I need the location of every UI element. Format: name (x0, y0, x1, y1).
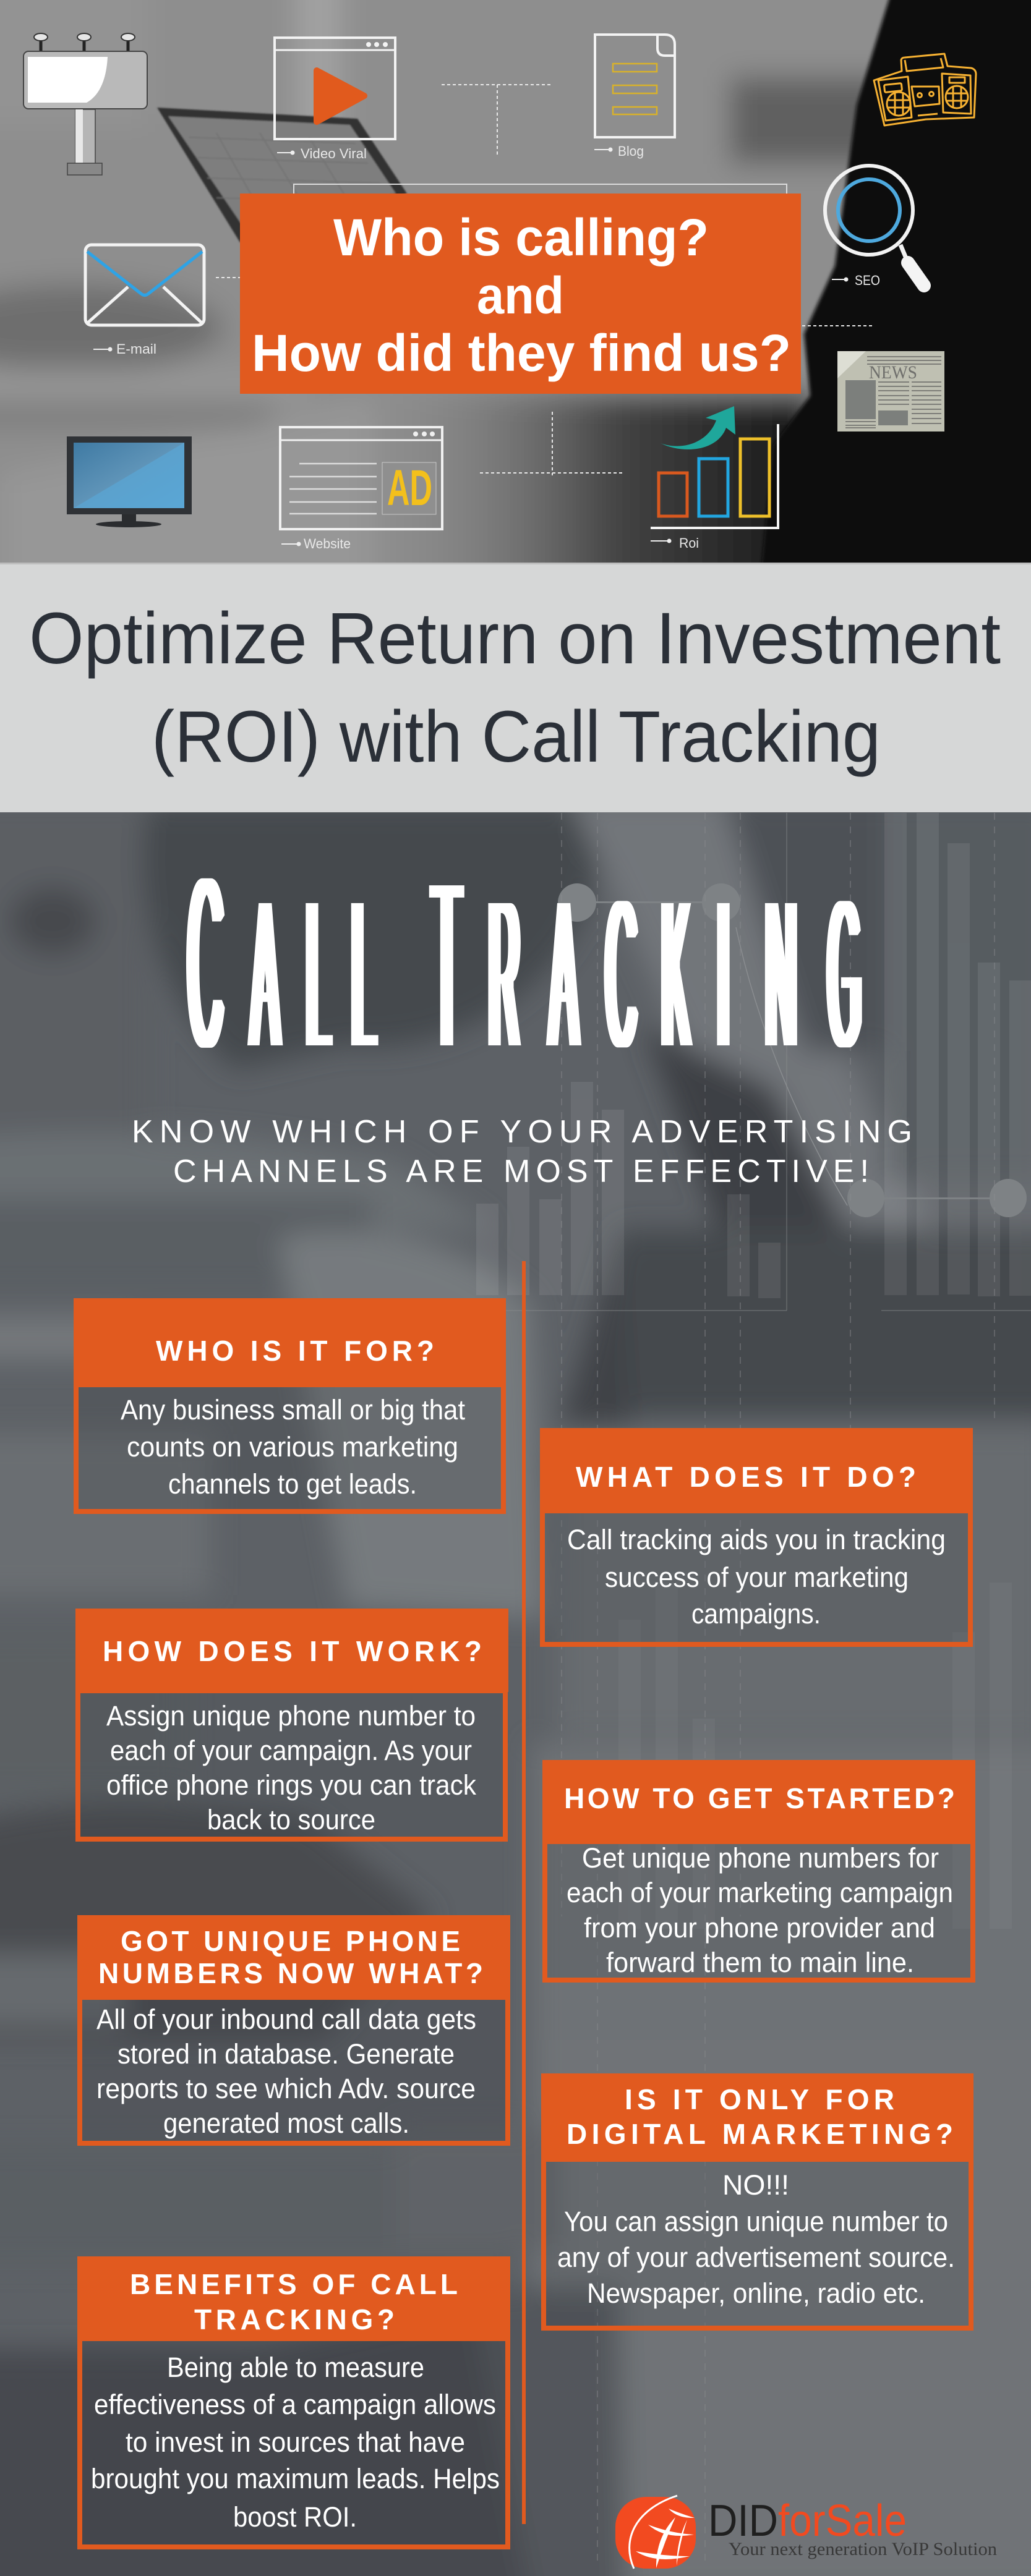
card: who is it for: counts on various marketing (127, 1431, 458, 1463)
card: how to get started (542, 1760, 975, 1980)
card: who is it for (74, 1298, 506, 1511)
card: who is it for: channels to get leads. (168, 1468, 417, 1500)
card: is it only for digital marketing: any of your advertisement source. (557, 2242, 955, 2273)
decorative chart bars (476, 813, 1031, 1298)
card: how does it work: back to source (207, 1804, 375, 1835)
icon: billboard (24, 33, 147, 175)
headline box: How did they find us? (252, 324, 791, 382)
section title: Call Tracking: C ALL T RACKING (188, 825, 861, 1102)
card: how to get started: from your phone provider and (584, 1912, 935, 1944)
dark photo background (0, 797, 1031, 2576)
subtitle: KNOW WHICH OF YOUR ADVERTISING (132, 1114, 912, 1150)
card: got unique phone numbers (77, 1915, 510, 2143)
card: how does it work: HOW DOES IT WORK? (103, 1635, 482, 1667)
card: how to get started: each of your marketing campaign (567, 1877, 953, 1908)
icon: email envelope: E-mail (116, 341, 156, 357)
subtitle (132, 1114, 912, 1189)
icon: website ad (280, 427, 442, 551)
connector: dashed T top (442, 85, 552, 157)
card: got unique phone numbers: All of your inbound call data gets (96, 2004, 476, 2035)
card: how to get started: forward them to main line. (606, 1947, 914, 1978)
title band (0, 563, 1031, 812)
card: got unique phone numbers: NUMBERS NOW WHAT? (98, 1957, 483, 1989)
headline box: Who is calling? (333, 208, 709, 266)
card: is it only for digital marketing: You can assign unique number to (564, 2206, 948, 2237)
title band: Optimize Return on Investment (29, 598, 1001, 679)
icon: newspaper (837, 351, 944, 431)
card: is it only for digital marketing: NO!!! (722, 2169, 789, 2201)
icon: video viral (275, 38, 395, 161)
logo: DIDforSale: Your next generation VoIP Solution (729, 2539, 997, 2559)
icon: ROI bar chart: Roi (679, 535, 699, 551)
icon: website ad: Website (304, 536, 351, 551)
card: got unique phone numbers: generated most calls. (163, 2107, 409, 2139)
card: is it only for digital marketing (541, 2073, 973, 2328)
card: benefits of call tracking: boost ROI. (233, 2501, 357, 2533)
headline box (240, 193, 801, 394)
card: how does it work (75, 1609, 508, 1839)
card: is it only for digital marketing: Newspaper, online, radio etc. (587, 2277, 925, 2309)
icon: blog document: Blog (618, 143, 644, 159)
card: got unique phone numbers: stored in database. Generate (118, 2038, 455, 2070)
icon: blog document (594, 35, 675, 159)
title band: (ROI) with Call Tracking (152, 696, 881, 778)
connector: dashed T bottom (480, 412, 625, 475)
card: is it only for digital marketing: DIGITAL MARKETING? (567, 2118, 953, 2150)
icon: magnifier SEO: SEO (855, 273, 880, 288)
decorative chart dots (558, 883, 1027, 1217)
icon: magnifier SEO (825, 166, 924, 288)
card: what does it do: Call tracking aids you in tracking (567, 1524, 946, 1555)
card: who is it for: Any business small or big that (121, 1394, 465, 1426)
card: what does it do: success of your marketing (605, 1562, 909, 1593)
card: what does it do: WHAT DOES IT DO? (576, 1461, 916, 1493)
icon: monitor (67, 436, 192, 527)
card: benefits of call tracking: effectiveness of a campaign allows (94, 2389, 496, 2420)
card: benefits of call tracking (77, 2256, 510, 2547)
logo: DIDforSale: DIDforSale (708, 2496, 907, 2546)
card: benefits of call tracking: to invest in sources that have (126, 2426, 465, 2458)
card: benefits of call tracking: brought you maximum leads. Helps (91, 2463, 500, 2494)
card: benefits of call tracking: Being able to measure (167, 2352, 424, 2383)
card: how does it work: each of your campaign. As your (110, 1735, 472, 1766)
hero photo background (0, 0, 1031, 618)
logo: DIDforSale (615, 2496, 997, 2569)
card: how does it work: Assign unique phone number to (106, 1700, 476, 1732)
headline box: and (477, 266, 564, 325)
card: got unique phone numbers: GOT UNIQUE PHONE (121, 1925, 460, 1957)
card: is it only for digital marketing: IS IT ONLY FOR (625, 2083, 894, 2115)
card: how to get started: HOW TO GET STARTED? (564, 1782, 955, 1814)
icon: email envelope (85, 245, 204, 357)
laptop (157, 108, 407, 242)
icon: ROI bar chart (651, 406, 778, 551)
connector: dashed lines around headline (216, 278, 873, 326)
card: who is it for: WHO IS IT FOR? (156, 1335, 434, 1367)
subtitle: CHANNELS ARE MOST EFFECTIVE! (173, 1154, 869, 1189)
card: benefits of call tracking: BENEFITS OF CALL (130, 2268, 458, 2300)
card: benefits of call tracking: TRACKING? (194, 2303, 395, 2336)
icon: boombox radio (874, 54, 976, 125)
icon: website ad: AD (387, 460, 432, 516)
thin frame behind headline (294, 184, 787, 193)
card: what does it do: campaigns. (691, 1598, 821, 1630)
card: got unique phone numbers: reports to see which Adv. source (96, 2073, 476, 2104)
card: how does it work: office phone rings you can track (106, 1769, 476, 1801)
card: what does it do (540, 1428, 973, 1644)
icon: video viral: Video Viral (301, 146, 367, 161)
card: how to get started: Get unique phone numbers for (582, 1842, 939, 1874)
center timeline line (522, 1261, 526, 2524)
icon: newspaper: NEWS (869, 362, 917, 383)
